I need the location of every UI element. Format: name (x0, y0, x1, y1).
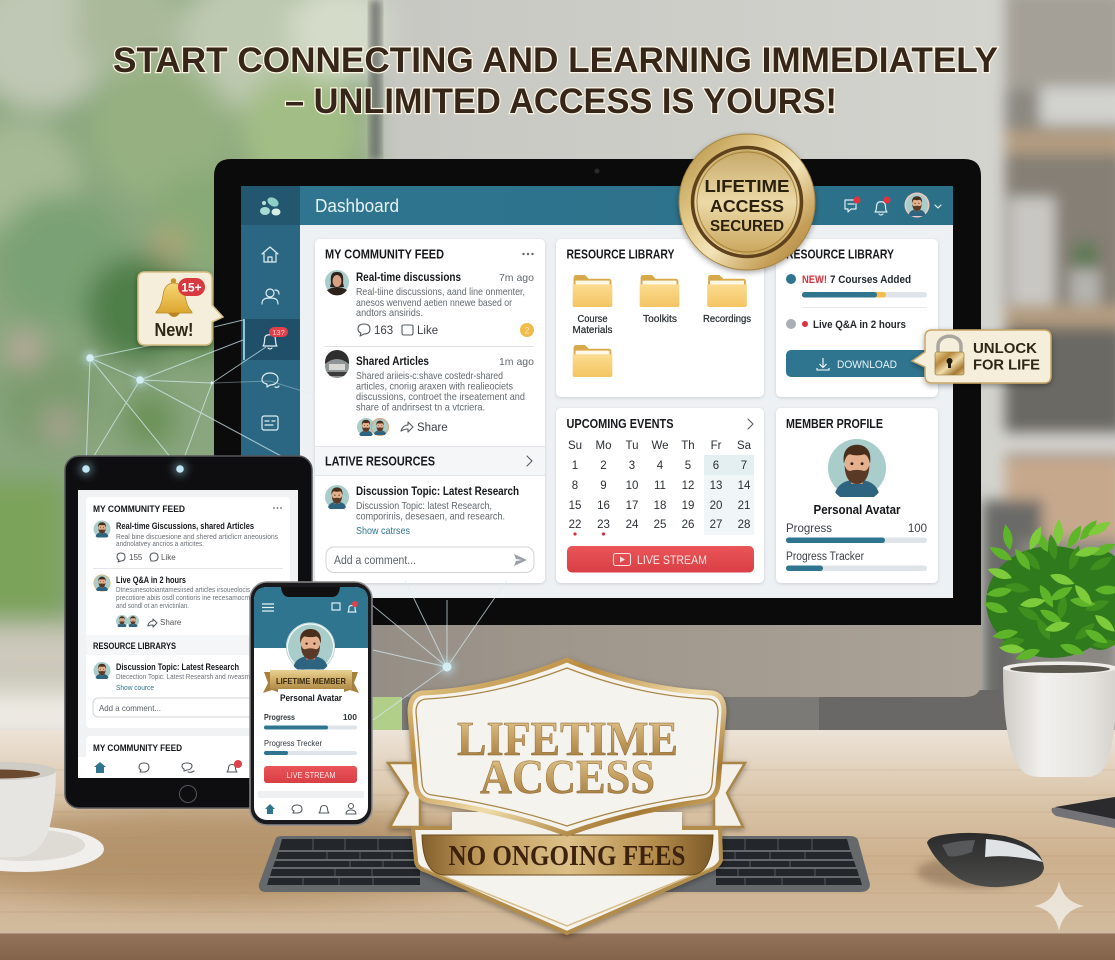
tablet second card (86, 736, 290, 770)
smartphone (250, 582, 372, 825)
calendar: 9 (600, 480, 607, 492)
panel: resource library updates (776, 239, 938, 397)
shield title: ACCESS (480, 749, 655, 804)
sparkle mark (1034, 881, 1084, 931)
calendar: 28 (738, 519, 750, 531)
post: shared articles: share of andrirsest tn a vtcriera. (356, 402, 485, 414)
post: real-time discussions: Like (417, 325, 438, 337)
network lines and glowing nodes (83, 320, 507, 720)
tablet feed card: Live Q&A in 2 hours (116, 575, 186, 585)
desktop monitor (214, 159, 981, 697)
calendar: 10 (626, 480, 638, 492)
tablet feed card: Dtecection Topic: Latest Researsh and nveasm (116, 674, 250, 681)
calendar: 19 (682, 500, 694, 512)
gold seal: lifetime access secured (679, 134, 815, 270)
post: real-time discussions: 163 (374, 325, 393, 337)
post: real-time discussions: Real-time discussions (356, 270, 461, 284)
post: discussion topic: Discussion Topic: Latest Research (356, 484, 519, 498)
folder: course materials: Materials (572, 325, 612, 336)
title: – UNLIMITED ACCESS IS YOURS! (285, 82, 837, 121)
post: discussion topic: Show catrses (356, 525, 410, 537)
padlock icon (935, 336, 964, 375)
calendar: 23 (597, 519, 610, 531)
download button (786, 350, 932, 377)
folder: course materials: Course (578, 314, 608, 325)
calendar: 13 (710, 480, 722, 492)
dashboard header: Dashboard (315, 196, 399, 216)
post: discussion topic: comporirıis, desesaen, and research. (356, 510, 505, 522)
calendar: 25 (654, 519, 666, 531)
folder: course materials (572, 275, 612, 336)
notification bell callout: New! (154, 320, 194, 340)
post: discussion topic: Discussion Topic: latest Research, (356, 500, 492, 512)
no ongoing fees band: NO ONGOING FEES (448, 841, 686, 872)
calendar: Tu (626, 440, 638, 452)
panel: upcoming events: UPCOMING EVENTS (566, 416, 674, 431)
calendar: Fr (711, 440, 722, 452)
calendar: 11 (654, 480, 666, 492)
title (113, 41, 998, 121)
white pot (1003, 668, 1115, 777)
tablet feed card: and sondl ot an ervictınlan. (116, 603, 189, 610)
calendar: 6 (713, 460, 719, 472)
gold bell icon (156, 278, 192, 317)
panel: member profile (776, 408, 938, 583)
shelves on the right wall (982, 0, 1115, 740)
tablet feed card: precotiore abiis osdl contioris ine recesamocm (116, 595, 250, 602)
post: shared articles: discussions, controet the irseatement and (356, 391, 525, 403)
tablet second card: MY COMMUNITY FEED (93, 743, 182, 754)
coffee cup and saucer (0, 762, 104, 872)
garden seen through the window (0, 0, 390, 740)
calendar (568, 440, 752, 536)
phone avatar (286, 622, 335, 674)
panel: my community feed (315, 239, 545, 583)
post: discussion topic (325, 484, 519, 537)
logo (260, 196, 280, 216)
unlock for life callout: FOR LIFE (973, 358, 1040, 374)
post: shared articles (325, 350, 534, 438)
calendar: Su (568, 440, 582, 452)
calendar: 12 (682, 480, 694, 492)
personal avatar (828, 439, 886, 502)
gold seal: lifetime access secured: ACCESS (710, 196, 784, 216)
calendar: 26 (682, 519, 694, 531)
tablet feed card: Real bine discuesione and shered articlicrr aneousions (116, 534, 278, 541)
post: real-time discussions (325, 270, 534, 347)
new courses notice: NEW! (802, 274, 827, 286)
progress tracker bar: Progress Tracker (786, 551, 864, 563)
folder: unlabeled (573, 345, 612, 377)
lifetime member ribbon: LIFETIME MEMBER (276, 676, 346, 686)
tablet feed card: Like (161, 553, 176, 562)
post: shared articles: articles, cnoriıg araxen with realieociets (356, 380, 513, 392)
tablet feed card: Real-time Giscussions, shared Articles (116, 521, 254, 531)
phone live stream button (264, 766, 357, 783)
gold seal: lifetime access secured: SECURED (710, 218, 784, 235)
folder: toolkits: Toolkits (643, 314, 677, 325)
calendar: 21 (738, 500, 750, 512)
new courses notice (786, 274, 927, 308)
tablet nav bar (78, 757, 298, 778)
plant in white pot (982, 517, 1115, 777)
calendar: 17 (626, 500, 638, 512)
tablet feed card: andnolatvey ancrios a articites. (116, 541, 204, 548)
post: shared articles: Shared Articles (356, 354, 429, 368)
upper panel (410, 660, 724, 834)
folder: recordings (703, 275, 751, 325)
mid ribbon (452, 812, 682, 836)
calendar: 4 (657, 460, 664, 472)
calendar: Th (681, 440, 695, 452)
tablet feed card: MY COMMUNITY FEED (93, 504, 185, 515)
phone progress: Progress (264, 712, 295, 722)
notification bell callout: 15+ (181, 280, 202, 294)
post: real-time discussions: anesos wenvend aetien nnewe based or (356, 297, 512, 309)
tablet feed card: Show cource (116, 683, 154, 692)
notification bell callout (138, 272, 223, 345)
folder: toolkits (640, 275, 679, 325)
post: shared articles: Share (417, 422, 448, 434)
comment input: Add a comment... (334, 555, 416, 567)
post: real-time discussions: Real-tiine discussions, aand line onmenter, (356, 286, 525, 298)
dashboard sidebar (241, 186, 300, 598)
shield title: LIFETIME (457, 711, 678, 766)
post: real-time discussions: andtors ansirids. (356, 307, 423, 319)
tablet feed card: Discussion Topic: Latest Research (116, 662, 239, 672)
calendar: 15 (569, 500, 581, 512)
calendar: 20 (710, 500, 722, 512)
monitor chin (214, 615, 981, 697)
progress bar (786, 523, 927, 543)
calendar: 24 (626, 519, 639, 531)
panel: upcoming events (556, 408, 764, 583)
post: real-time discussions: 7m ago (499, 272, 534, 284)
calendar: 27 (710, 519, 722, 531)
unlock for life callout (912, 330, 1051, 383)
calendar: 22 (569, 519, 581, 531)
phone live stream button: LIVE STREAM (286, 771, 336, 780)
unlock for life callout: UNLOCK (973, 341, 1038, 357)
tablet feed card: 155 (129, 553, 143, 562)
post: shared articles: 1m ago (499, 356, 534, 368)
comment input (326, 547, 534, 572)
screen (241, 186, 953, 598)
tablet feed card: Share (160, 618, 182, 627)
calendar: Sa (737, 440, 752, 452)
desk surface (0, 730, 1115, 960)
panel: my community feed: MY COMMUNITY FEED (325, 246, 444, 262)
section band: lative resources (315, 446, 545, 476)
progress bar: Progress (786, 523, 832, 535)
panel: member profile: Personal Avatar (814, 502, 900, 517)
panel: resource library (556, 239, 764, 397)
calendar: 2 (600, 460, 607, 472)
calendar: 18 (654, 500, 666, 512)
tablet feed card: RESOURCE LIBRARYS (93, 641, 176, 652)
computer mouse (917, 833, 1044, 888)
live stream button: LIVE STREAM (637, 555, 707, 567)
calendar: 14 (738, 480, 751, 492)
lifetime member ribbon (263, 670, 359, 693)
section band: lative resources: LATIVE RESOURCES (325, 454, 435, 468)
tablet feed card (86, 497, 290, 728)
calendar: 7 (741, 460, 747, 472)
calendar: Mo (596, 440, 611, 452)
calendar: 5 (685, 460, 691, 472)
tablet feed card: Dtnesunesotoiantamesiısed articles irsoueolocis (116, 587, 250, 594)
keyboard (259, 836, 870, 892)
progress bar: 100 (908, 523, 927, 535)
phone progress: 100 (343, 712, 357, 722)
panel: resource library: RESOURCE LIBRARY (566, 246, 675, 262)
calendar: 8 (572, 480, 578, 492)
phone progress (264, 712, 357, 755)
shield title (457, 711, 678, 804)
new courses notice: 7 Courses Added (830, 274, 911, 286)
title: START CONNECTING AND LEARNING IMMEDIATELY (113, 41, 998, 80)
panel: member profile: MEMBER PROFILE (786, 416, 883, 431)
live Q&A notice: Live Q&A in 2 hours (813, 319, 906, 331)
lower shield (413, 828, 721, 933)
tablet network nodes (79, 462, 187, 476)
smartphone: Personal Avatar (280, 693, 342, 704)
tablet (65, 456, 312, 808)
folder: recordings: Recordings (703, 314, 751, 325)
live stream button (567, 546, 754, 572)
calendar: 3 (629, 460, 635, 472)
tablet feed card: Add a comment... (99, 703, 161, 713)
dashboard header (300, 186, 953, 225)
post: shared articles: Shared ariieis-c:shave costedr-shared (356, 370, 503, 382)
sidebar icons: 13? (272, 328, 285, 337)
ribbon tails (388, 763, 745, 827)
calendar: We (651, 440, 669, 452)
lifetime access shield (388, 660, 745, 933)
phone progress: Progress Trecker (264, 738, 322, 748)
post: real-time discussions: 2 (524, 326, 530, 336)
panel: resource library updates: RESOURCE LIBRARY (786, 246, 894, 262)
progress tracker bar (786, 551, 927, 571)
second phone on desk (1052, 797, 1115, 828)
calendar: 1 (572, 460, 578, 472)
download button: DOWNLOAD (837, 359, 897, 371)
foliage (982, 517, 1115, 663)
phone nav bar (265, 804, 356, 814)
backdrop behind monitor (384, 690, 1024, 731)
monitor bezel (214, 159, 981, 625)
calendar: 16 (597, 500, 610, 512)
gold seal: lifetime access secured: LIFETIME (704, 176, 790, 196)
sidebar icons (262, 247, 288, 430)
